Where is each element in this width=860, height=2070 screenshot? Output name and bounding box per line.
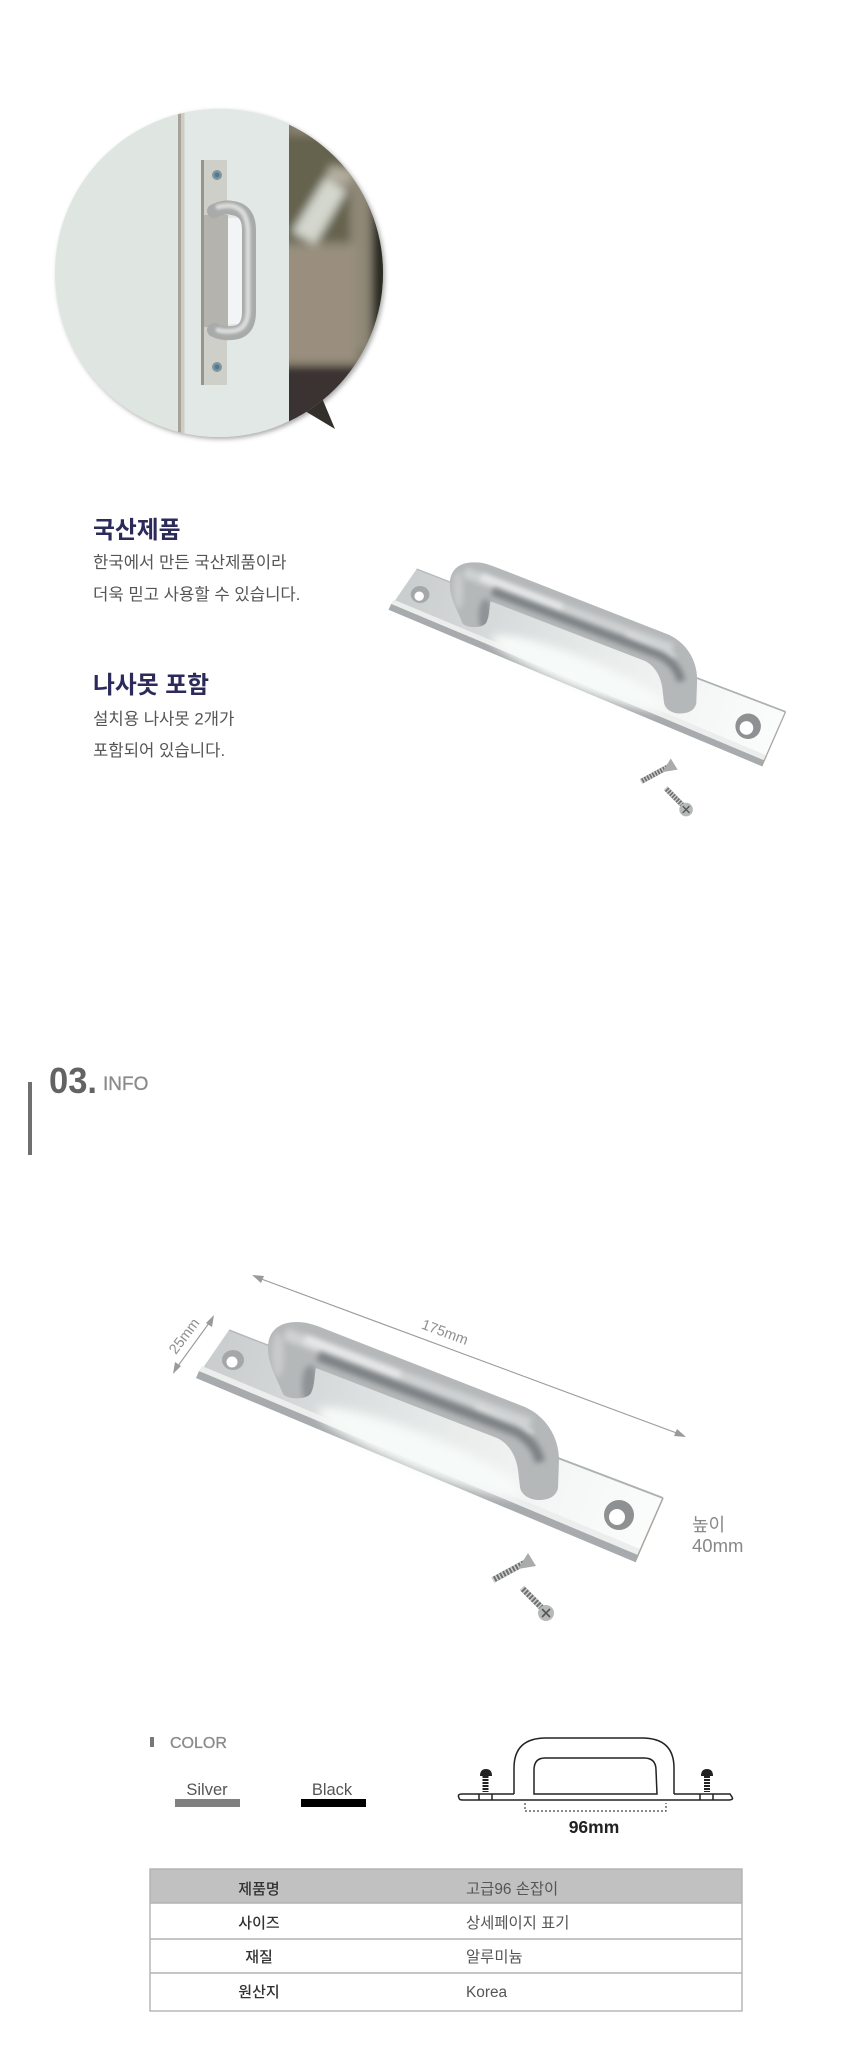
- row: size: 사이즈: [238, 1915, 280, 1932]
- row: origin: [238, 1984, 508, 2001]
- row: size: 상세페이지 표기: [466, 1914, 569, 1932]
- row: origin: 원산지: [238, 1984, 280, 2001]
- heading: screws included: 나사못 포함: [93, 672, 209, 699]
- handle plate in circle: [201, 160, 249, 385]
- text block: domestic product: [93, 517, 300, 604]
- row: origin: Korea: [466, 1984, 508, 2001]
- swatch: silver: Silver: [186, 1781, 228, 1799]
- arrow: width 25mm: [166, 1315, 214, 1374]
- swatch: black: Black: [312, 1781, 353, 1799]
- body text: 포함되어 있습니다.: [93, 741, 225, 760]
- label: height 40mm: 40mm: [692, 1535, 743, 1556]
- row: product name: [238, 1880, 558, 1898]
- icon: screws: [493, 1553, 554, 1621]
- body text: 설치용 나사못 2개가: [93, 710, 234, 728]
- row: material: [245, 1948, 523, 1966]
- arrow: length 175mm: [252, 1275, 686, 1437]
- row: material: 재질: [245, 1949, 273, 1966]
- diagram: side profile 96mm: [458, 1738, 732, 1837]
- table header fill: [150, 1869, 742, 1903]
- accent bar: [28, 1082, 32, 1155]
- body text: [93, 553, 300, 604]
- handle bar: [268, 1322, 559, 1500]
- swatch: black: [301, 1781, 366, 1807]
- color heading: COLOR: [170, 1735, 227, 1752]
- body text: 한국에서 만든 국산제품이라: [93, 553, 287, 572]
- text block: screws included: [93, 672, 234, 760]
- photo: handle and screws: [389, 556, 786, 816]
- dotted bracket: [525, 1803, 666, 1811]
- photo: door handle in speech-bubble circle: [50, 100, 392, 446]
- body text: [93, 710, 234, 760]
- section number: 03.: [49, 1060, 97, 1101]
- section heading: 03 INFO: [28, 1060, 148, 1155]
- arrow: width 25mm: 25mm: [166, 1316, 203, 1358]
- label: height 40mm: [692, 1515, 743, 1556]
- photo: handle with dimensions: [166, 1275, 743, 1621]
- icon: left screw: [480, 1769, 492, 1792]
- swatch: silver: [175, 1781, 240, 1807]
- icon: right screw: [701, 1769, 713, 1792]
- label: 96mm: 96mm: [569, 1817, 619, 1837]
- row: material: 알루미늄: [466, 1948, 523, 1966]
- arrow: length 175mm: 175mm: [419, 1317, 470, 1349]
- section label: INFO: [103, 1074, 148, 1095]
- body text: 더욱 믿고 사용할 수 있습니다.: [93, 585, 300, 604]
- handle plate: [196, 1330, 663, 1562]
- label: height 40mm: 높이: [692, 1515, 725, 1535]
- row: product name: 고급96 손잡이: [466, 1880, 558, 1898]
- handle outline: [458, 1738, 732, 1800]
- row: size: [238, 1914, 569, 1932]
- row: product name: 제품명: [238, 1881, 280, 1898]
- heading: domestic product: 국산제품: [93, 517, 181, 544]
- color options: [150, 1735, 366, 1807]
- spec table: [150, 1869, 742, 2011]
